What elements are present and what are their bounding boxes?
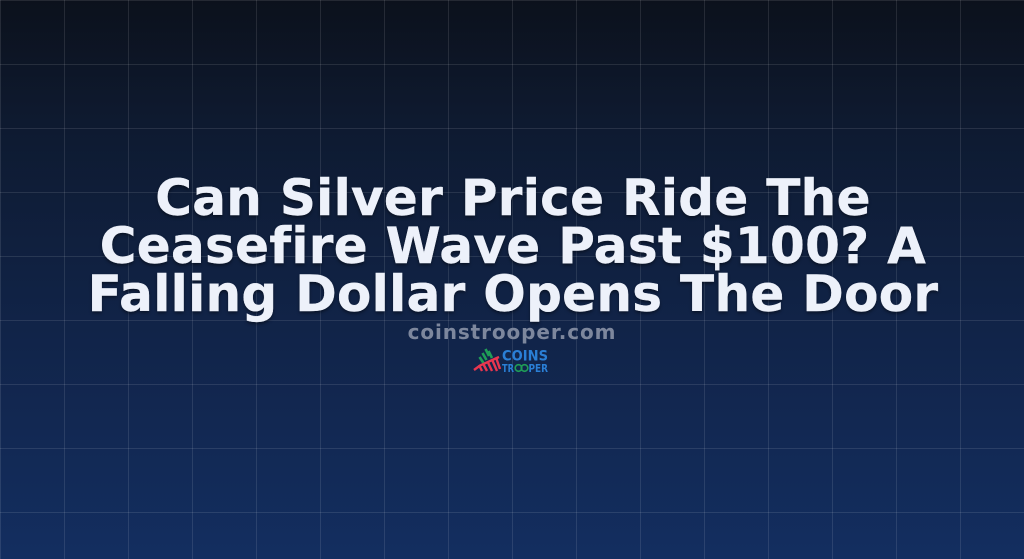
logo: Coins Trooper: COINS	[502, 348, 548, 364]
title: Ceasefire Wave Past $100? A	[100, 217, 926, 275]
title	[88, 169, 939, 326]
logo: Coins Trooper	[473, 348, 548, 374]
website address: coinstrooper.com	[408, 320, 616, 344]
title: Can Silver Price Ride The	[155, 169, 871, 227]
title: Falling Dollar Opens The Door	[88, 265, 938, 323]
